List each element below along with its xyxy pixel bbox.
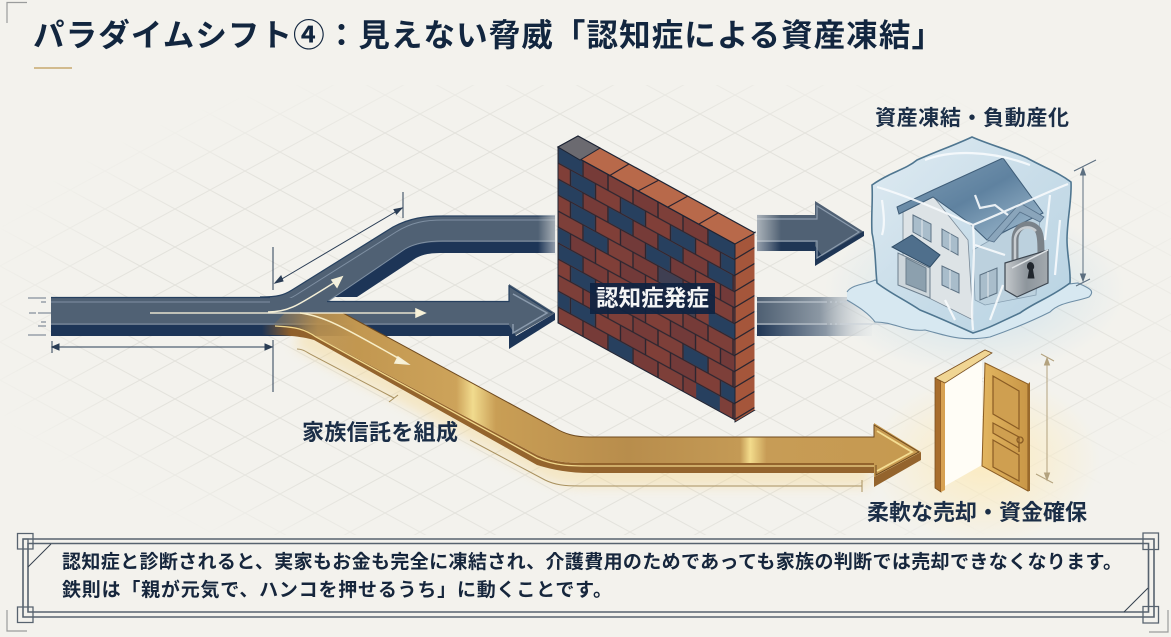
open door [935,350,1054,492]
callout frame [18,533,1158,623]
door opening [945,361,982,486]
title underline [34,67,72,69]
wall side face [735,232,755,422]
title: パラダイムシフト④：見えない脅威「認知症による資産凍結」 [33,17,943,53]
ice block [872,137,1071,333]
fading blocked route [757,297,890,336]
arrow: gold route, family trust [262,313,921,487]
wall top face [558,136,755,244]
dimension lines: navy paths [28,192,403,392]
cube height dimension [1074,160,1096,286]
brick wall [558,136,755,422]
padlock [1005,225,1048,297]
callout box [18,533,1158,623]
label: family trust: 家族信託を組成 [302,420,458,445]
arrow: straight navy route into wall [51,284,555,349]
wall label: 認知症発症 [596,286,709,311]
arrow: upper output past wall [757,201,864,266]
door height dimension [1036,354,1054,483]
callout text line 2: 鉄則は「親が元気で、ハンコを押せるうち」に動くことです。 [62,578,612,601]
callout text line 1: 認知症と診断されると、実家もお金も完全に凍結され、介護費用のためであっても家族の判断では売却できなくなります。 [62,551,1122,573]
puddle [847,280,1092,339]
ice edges and cracks [877,153,1068,330]
door leaf [982,363,1028,491]
wall front face [558,147,735,420]
label: frozen assets: 資産凍結・負動産化 [875,107,1069,130]
arrow: upper navy route [260,214,556,335]
flow highlights: white arrows [150,277,425,364]
label: flexible sale: 柔軟な売却・資金確保 [867,500,1087,525]
frozen asset: ice cube with house and lock [847,137,1096,339]
door frame [935,378,941,492]
house [892,158,1044,320]
thin gold dimension lines [297,349,862,492]
